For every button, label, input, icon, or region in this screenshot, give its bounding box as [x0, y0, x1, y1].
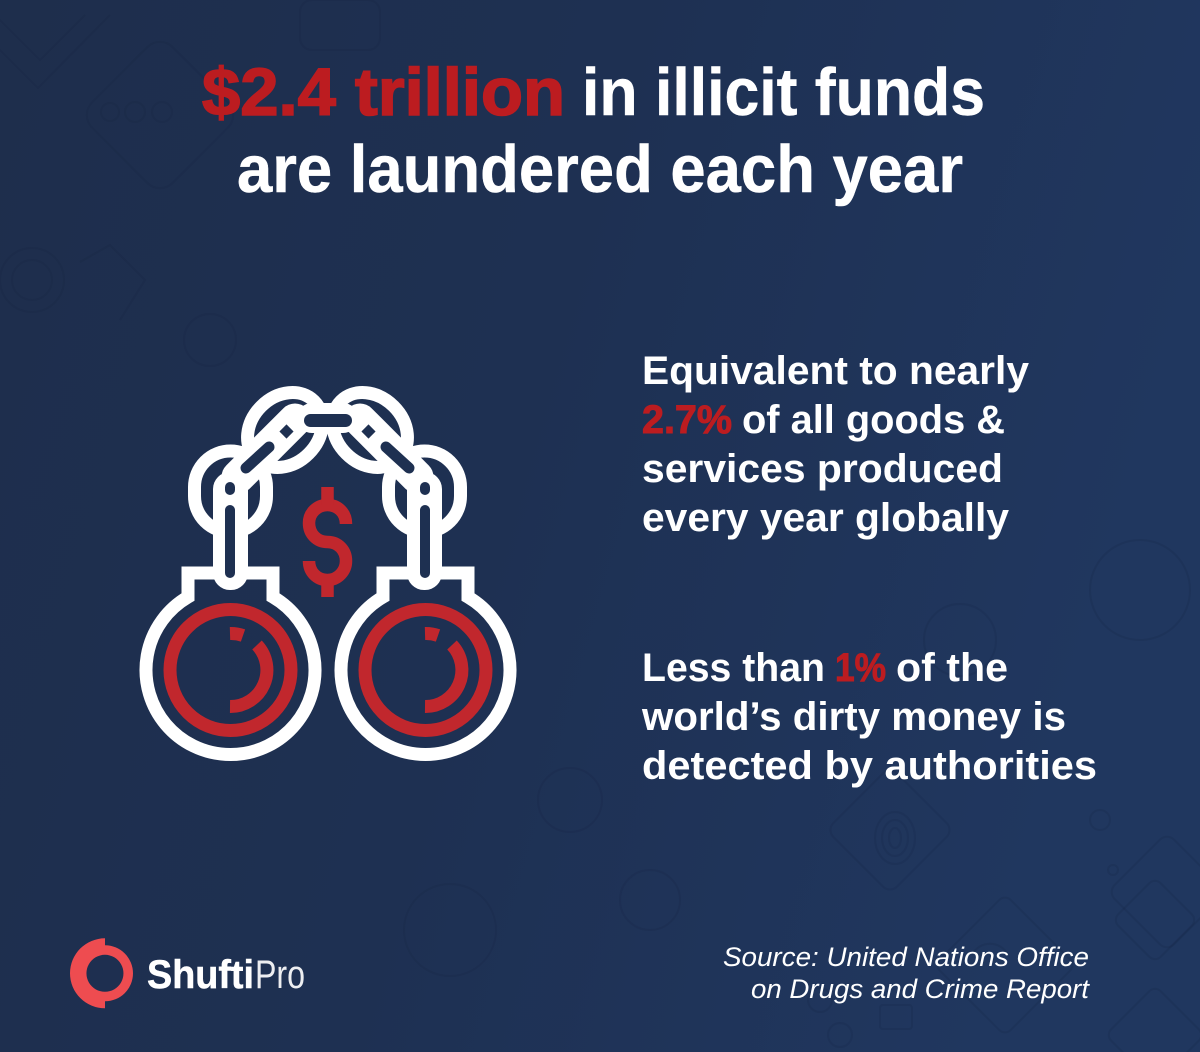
title line 2: are laundered each year [237, 132, 963, 207]
logo wordmark: Shufti [147, 953, 254, 997]
text block: share of global output: every year globally [642, 496, 1010, 540]
icon: handcuffs with dollar sign [146, 377, 510, 755]
logo: ShuftiPro [70, 938, 305, 1008]
title highlight: $2.4 trillion: $2.4 trillion [202, 55, 565, 130]
chain left half [194, 377, 338, 590]
source note: Source: United Nations Office [723, 942, 1089, 972]
text block: share of global output: Equivalent to nearly [642, 349, 1030, 393]
icon: logo ring [70, 938, 133, 1008]
title line 1 remainder: in illicit funds [582, 55, 985, 130]
text block: share of global output [642, 349, 1030, 540]
chain centre link [297, 403, 358, 433]
text block: detection rate: Less than [642, 646, 825, 690]
title [202, 55, 985, 207]
source note: on Drugs and Crime Report [751, 974, 1091, 1004]
text block: detection rate: detected by authorities [642, 744, 1097, 788]
source note [723, 942, 1091, 1004]
text block: detection rate: 1% [835, 646, 886, 690]
text block: detection rate: world’s dirty money is [641, 695, 1066, 739]
right cuff [341, 573, 510, 755]
text block: share of global output: of all goods & [742, 398, 1005, 442]
logo: ShuftiPro: Pro [255, 953, 305, 997]
left cuff [146, 573, 315, 755]
text block: share of global output: 2.7% [642, 398, 732, 442]
chain right half [317, 377, 460, 590]
text block: detection rate: of the [896, 646, 1008, 690]
icon: dollar sign [309, 487, 346, 597]
text block: share of global output: services produced [642, 447, 1003, 491]
text block: detection rate [641, 646, 1097, 788]
